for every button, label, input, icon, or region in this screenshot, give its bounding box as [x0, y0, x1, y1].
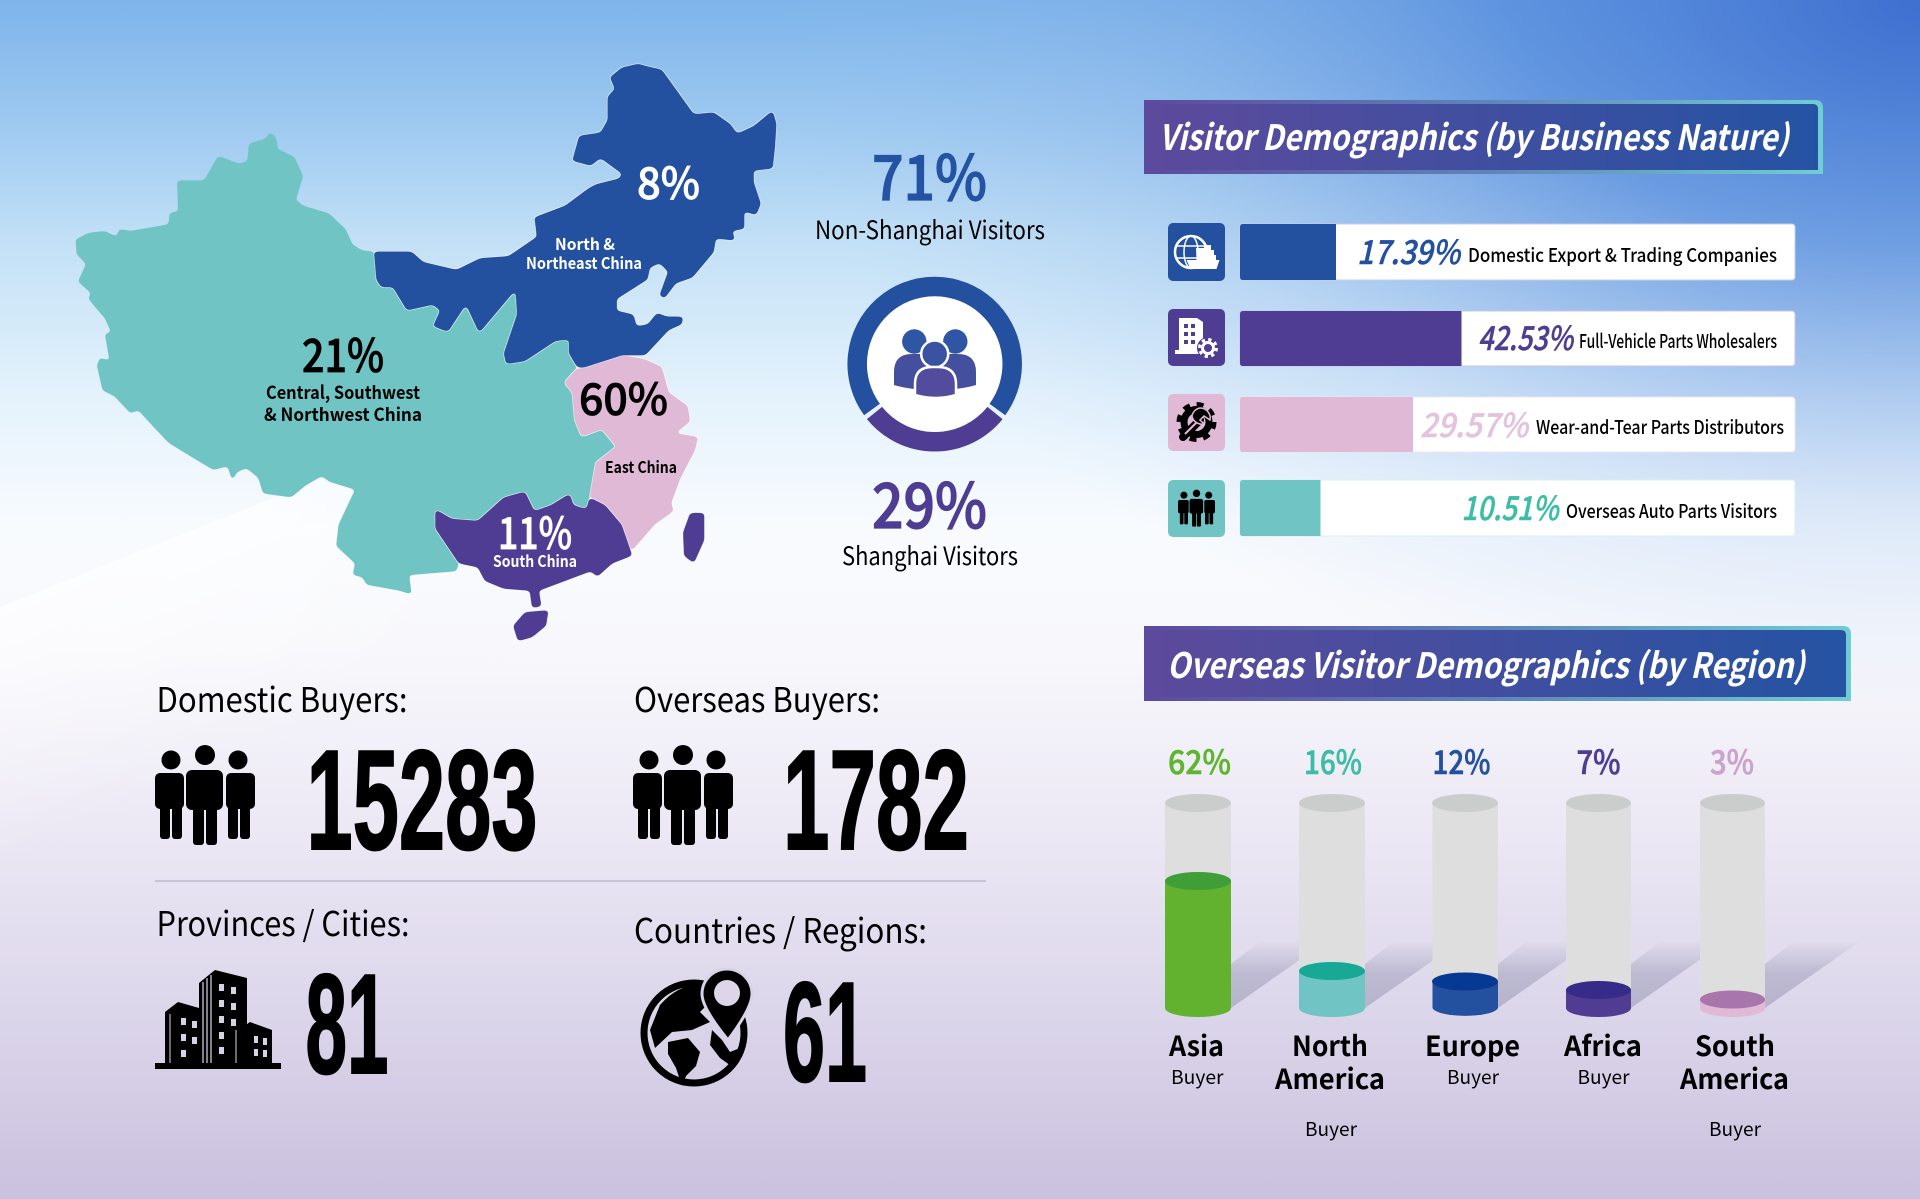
heading: visitor demographics: Visitor Demographics (by Business Nature) [1159, 110, 1791, 161]
region: central, southwest and northwest China [76, 132, 616, 595]
bar [1240, 480, 1320, 536]
label: Full-Vehicle Parts Wholesalers [1579, 327, 1777, 354]
stat: overseas buyers: Overseas Buyers: [634, 673, 880, 722]
map label: south: South China [493, 548, 577, 572]
column: North America: North [1292, 1025, 1368, 1065]
number: 81 [306, 945, 388, 1104]
stat: Shanghai: 29% [872, 456, 987, 546]
region: east China [564, 355, 698, 552]
icon: people [894, 329, 976, 398]
column: Europe: 12% [1432, 736, 1490, 784]
stat: domestic buyers [155, 673, 538, 880]
region: south China [435, 492, 632, 608]
stat: provinces and cities: Provinces / Cities: [156, 897, 410, 946]
bar [1240, 397, 1413, 452]
icon: people [155, 745, 255, 845]
map of China [76, 64, 776, 641]
stat: countries and regions [634, 904, 927, 1112]
column: South America [1679, 736, 1862, 1142]
column: Europe [1425, 736, 1595, 1090]
icon: buildings [155, 970, 281, 1069]
column: Africa: 7% [1576, 736, 1620, 784]
map label: north and northeast: 8% [637, 148, 700, 212]
column: North America: Buyer [1305, 1115, 1358, 1142]
map label: north and northeast [526, 148, 700, 274]
column: Asia: Buyer [1171, 1063, 1224, 1090]
map label: east: East China [605, 454, 677, 478]
row: wear and tear parts distributors [1168, 394, 1795, 452]
label: Overseas Auto Parts Visitors [1566, 497, 1777, 524]
icon: globe and ship [1168, 223, 1225, 281]
column: Europe: Europe [1425, 1025, 1520, 1065]
cylinder chart [1165, 736, 1862, 1142]
row: domestic export and trading companies [1168, 223, 1795, 281]
row: overseas auto parts visitors [1168, 480, 1795, 537]
column: Europe: Buyer [1447, 1063, 1500, 1090]
number: 1782 [783, 721, 969, 880]
label: Domestic Export & Trading Companies [1468, 241, 1777, 268]
donut chart [857, 286, 1012, 442]
column: Africa [1563, 736, 1728, 1090]
column: Africa: Buyer [1578, 1063, 1630, 1090]
stat: non-Shanghai: 71% [872, 128, 987, 218]
value: 10.51% [1462, 482, 1560, 530]
map label: central, southwest and northwest: 21% [302, 320, 384, 386]
column: Asia: 62% [1168, 736, 1231, 784]
column: Asia [1165, 736, 1328, 1090]
icon: gear and wrench [1168, 394, 1225, 451]
row: full-vehicle parts wholesalers [1168, 309, 1795, 366]
value: 29.57% [1420, 399, 1530, 447]
column: North America: America [1274, 1058, 1385, 1098]
number: 61 [783, 953, 867, 1112]
map label: east [579, 364, 677, 478]
column: South America: 3% [1710, 736, 1754, 784]
icon: building and gear [1168, 309, 1225, 366]
region: north and northeast China [374, 64, 776, 368]
stat: Shanghai [842, 456, 1018, 573]
map label: south: 11% [498, 498, 572, 562]
icon: globe and location pin [644, 969, 752, 1086]
map label: central, southwest and northwest [264, 320, 422, 427]
stat: non-Shanghai: Non-Shanghai Visitors [815, 211, 1045, 247]
icon: people [1168, 480, 1225, 537]
stat: domestic buyers: Domestic Buyers: [156, 673, 408, 722]
column: South America: Buyer [1709, 1115, 1762, 1142]
icon: people [633, 745, 733, 845]
number: 15283 [306, 721, 538, 880]
value: 17.39% [1357, 226, 1462, 274]
map label: north and northeast: North & [555, 231, 615, 255]
map label: east: 60% [579, 364, 668, 428]
column: North America [1274, 736, 1462, 1142]
stat: non-Shanghai [815, 128, 1045, 247]
heading: overseas visitor demographics [1144, 626, 1851, 701]
column: South America: South [1695, 1025, 1775, 1065]
column: Asia: Asia [1168, 1025, 1224, 1065]
heading: overseas visitor demographics: Overseas Visitor Demographics (by Region) [1167, 638, 1807, 689]
value: 42.53% [1478, 312, 1575, 360]
column: South America: America [1679, 1058, 1789, 1098]
shanghai share panel [815, 128, 1045, 573]
stat: overseas buyers [633, 673, 969, 880]
map label: central, southwest and northwest: Central, Southwest [266, 379, 420, 405]
stat: Shanghai: Shanghai Visitors [842, 537, 1018, 573]
stat: countries and regions: Countries / Regions: [634, 904, 927, 953]
heading: visitor demographics [1144, 100, 1823, 174]
column: Africa: Africa [1563, 1025, 1642, 1065]
bar [1240, 311, 1462, 366]
label: Wear-and-Tear Parts Distributors [1536, 413, 1784, 440]
bar [1240, 224, 1336, 280]
map label: central, southwest and northwest: & Northwest China [264, 401, 422, 427]
island: Hainan [513, 610, 549, 641]
map label: north and northeast: Northeast China [526, 250, 642, 274]
island: Taiwan [683, 513, 704, 563]
column: North America: 16% [1304, 736, 1362, 784]
stat: provinces and cities [155, 897, 410, 1104]
